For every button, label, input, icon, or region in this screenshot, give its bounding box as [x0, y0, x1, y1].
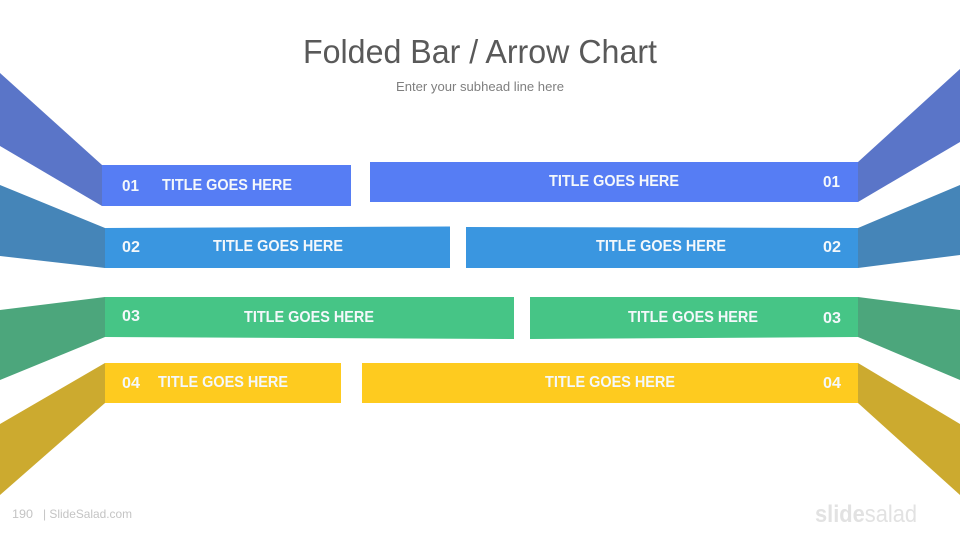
bar: 01 left	[102, 165, 351, 206]
row 03 left	[0, 297, 514, 380]
bar: 01 right	[370, 162, 858, 202]
logo: slidesalad: slidesalad	[815, 501, 917, 528]
number: 04 left: 04	[122, 375, 140, 392]
footer	[12, 507, 132, 521]
fold: 03 right	[858, 297, 960, 380]
number: 01 right: 01	[823, 174, 840, 191]
bar: 04 left	[105, 363, 341, 403]
bar: 04 right	[362, 363, 858, 403]
row 01 right	[370, 69, 960, 202]
row 02 left	[0, 185, 450, 268]
fold: 02 left	[0, 185, 105, 268]
fold: 02 right	[858, 185, 960, 268]
bar: 02 left	[105, 226, 450, 268]
row 04 right	[362, 363, 960, 495]
fold: 04 right	[858, 363, 960, 495]
bar: 02 right	[466, 227, 858, 268]
fold: 03 left	[0, 297, 105, 380]
footer site name: | SlideSalad.com	[43, 507, 132, 521]
row 02 right	[466, 185, 960, 268]
number: 02 left: 02	[122, 239, 140, 256]
row 01 left	[0, 73, 351, 206]
label: 01 right: TITLE GOES HERE	[549, 173, 679, 190]
number: 04 right: 04	[823, 375, 841, 392]
label: 02 right: TITLE GOES HERE	[596, 238, 726, 255]
number: 03 left: 03	[122, 308, 140, 325]
label: 04 left: TITLE GOES HERE	[158, 374, 288, 391]
row 03 right	[530, 297, 960, 380]
label: 03 right: TITLE GOES HERE	[628, 309, 758, 326]
bar: 03 left	[105, 297, 514, 339]
number: 03 right: 03	[823, 310, 841, 327]
label: 01 left: TITLE GOES HERE	[162, 177, 292, 194]
footer page number: 190	[12, 507, 33, 521]
number: 02 right: 02	[823, 239, 841, 256]
label: 04 right: TITLE GOES HERE	[545, 374, 675, 391]
fold: 01 right	[858, 69, 960, 202]
fold: 04 left	[0, 363, 105, 495]
bar: 03 right	[530, 297, 858, 339]
label: 02 left: TITLE GOES HERE	[213, 238, 343, 255]
subhead: Enter your subhead line here	[396, 79, 564, 94]
label: 03 left: TITLE GOES HERE	[244, 309, 374, 326]
number: 01 left: 01	[122, 178, 139, 195]
row 04 left	[0, 363, 341, 495]
fold: 01 left	[0, 73, 102, 206]
title: Folded Bar / Arrow Chart	[303, 33, 657, 70]
